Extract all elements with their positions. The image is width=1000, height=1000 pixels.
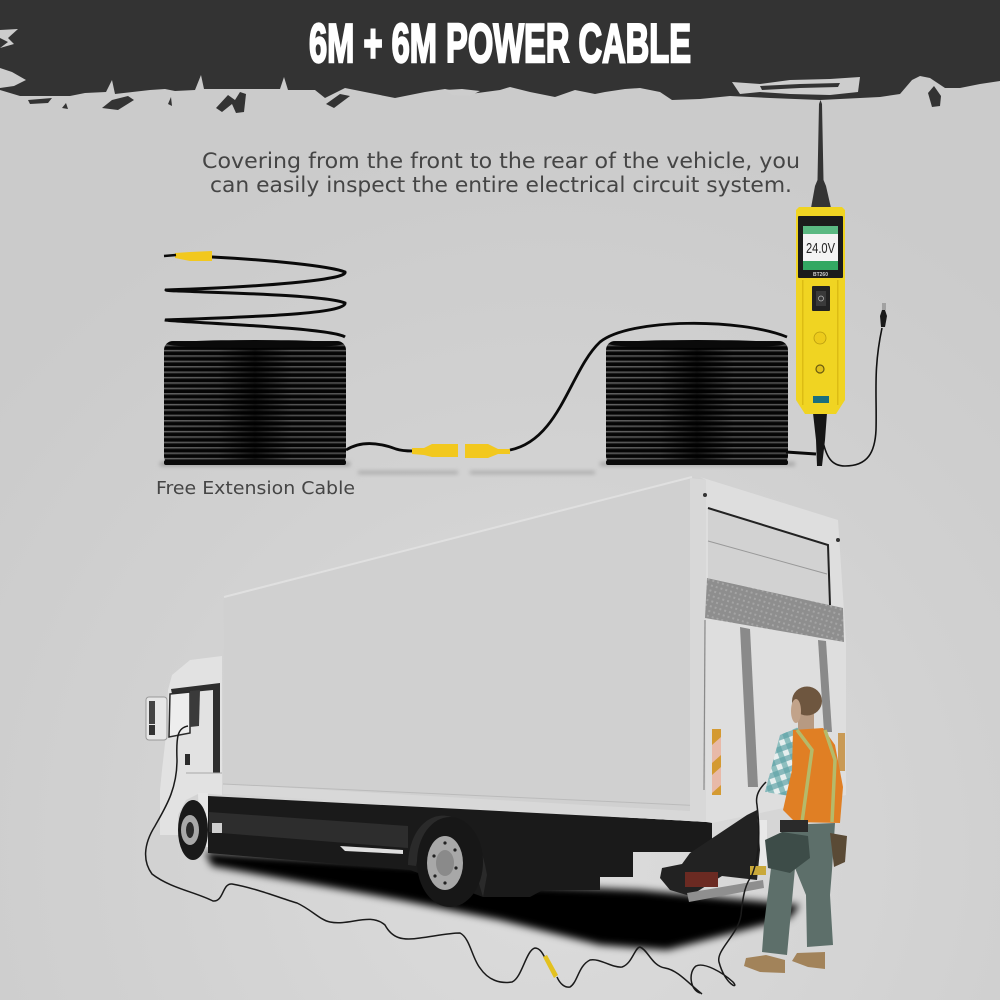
- connector shadows: [358, 471, 595, 474]
- label: free extension cable: Free Extension Cable: [156, 479, 355, 499]
- long test lead on ground: [146, 726, 766, 994]
- gap under chassis: [340, 846, 403, 854]
- box rear face: [700, 477, 846, 823]
- probe: [811, 100, 831, 208]
- in-line yellow connector: [543, 955, 558, 978]
- description text: Covering from the front to the rear of the vehicle, you: [202, 149, 800, 173]
- truck: [146, 477, 846, 907]
- connection cables and yellow plugs: [346, 323, 787, 458]
- rear edge line: [704, 620, 705, 790]
- boots: [744, 952, 825, 973]
- extension cable coil with plug: [160, 251, 350, 466]
- circuit tester device: [796, 100, 845, 466]
- main cable coil: [600, 340, 816, 466]
- truck shadow on ground: [205, 852, 800, 950]
- round button: [814, 332, 826, 344]
- chassis: [208, 796, 712, 897]
- box lower strip: [223, 784, 706, 822]
- legs: [762, 823, 835, 955]
- description text: [202, 149, 800, 197]
- shirt arm: [765, 725, 806, 796]
- tail lift mechanism: [660, 810, 767, 902]
- mechanic: [744, 686, 847, 973]
- model label: BT260: [813, 272, 828, 278]
- screen: [798, 216, 843, 278]
- roller door window: [703, 493, 840, 605]
- box side panel: [223, 477, 706, 822]
- crocodile clip wire: [822, 303, 887, 466]
- socket: [816, 365, 824, 373]
- cab: [146, 656, 222, 847]
- chassis rail: [209, 812, 408, 848]
- neck and head: [798, 714, 814, 730]
- brand badge: [813, 396, 829, 403]
- box rear corner post: [690, 478, 708, 822]
- header banner with torn edge: [0, 0, 1000, 113]
- reading: 24.0V: [806, 240, 835, 257]
- yellow body: [796, 207, 845, 414]
- rear wheel: [408, 816, 487, 907]
- hi-vis vest: [783, 728, 843, 823]
- mirror: [146, 697, 167, 740]
- box strip line: [223, 784, 706, 806]
- front wheel: [178, 800, 208, 860]
- lift straps: [740, 627, 832, 787]
- rocker switch: [812, 286, 830, 311]
- description text: can easily inspect the entire electrical circuit system.: [210, 173, 792, 197]
- title: 6M + 6M POWER CABLE: [309, 12, 691, 74]
- tool belt: [765, 820, 847, 873]
- checker plate: [705, 578, 844, 642]
- warning stripes: [712, 729, 845, 795]
- box top edge highlight: [224, 477, 692, 597]
- strain relief: [813, 413, 827, 466]
